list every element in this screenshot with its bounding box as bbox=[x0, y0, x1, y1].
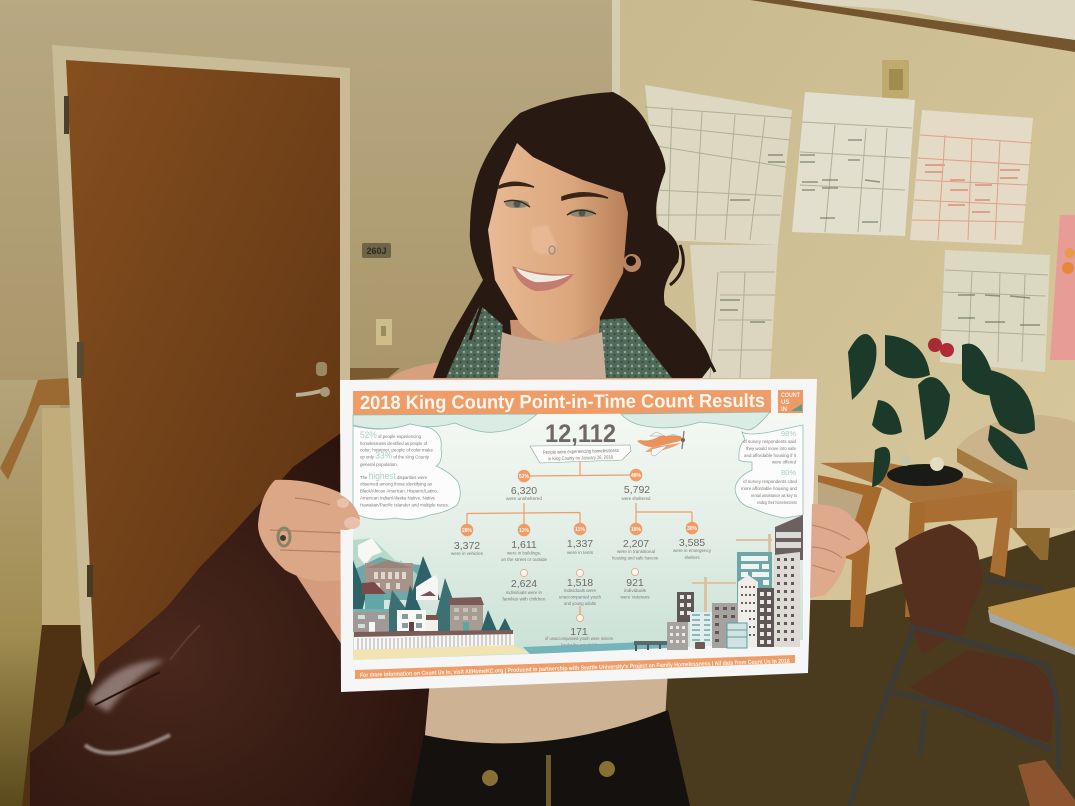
statistics numbers: 5,792 bbox=[624, 484, 650, 496]
headline total 12,112: 12,112 bbox=[545, 420, 616, 448]
percent circles: 30% bbox=[687, 526, 698, 532]
left demographics cloud: Hawaiian/Pacific Islander and multiple races. bbox=[360, 502, 449, 508]
right survey cloud: and affordable housing if it bbox=[744, 453, 797, 458]
right survey cloud: of survey respondents said bbox=[743, 439, 796, 444]
woman: hair strands bbox=[470, 245, 715, 378]
statistics captions: housing and safe havens bbox=[612, 556, 659, 560]
title band: 2018 King County Point-in-Time Count Results bbox=[360, 391, 765, 414]
right survey cloud: of survey respondents cited bbox=[743, 479, 797, 484]
picket fence bbox=[354, 634, 514, 650]
right survey cloud: rental assistance as key to bbox=[751, 493, 797, 498]
wall calendars bbox=[645, 85, 1050, 378]
statistics numbers: 921 bbox=[626, 577, 644, 589]
woman: left arm and hand bbox=[258, 480, 360, 645]
left demographics cloud bbox=[353, 424, 460, 519]
left demographics cloud: The highest disparities were bbox=[360, 471, 427, 481]
potted plant bbox=[848, 334, 1035, 487]
left demographics cloud: homelessness identified as people of bbox=[360, 441, 428, 446]
right survey cloud: they would move into safe bbox=[746, 446, 796, 451]
ribbon with headline caption bbox=[530, 445, 631, 463]
percent circles: 12% bbox=[519, 528, 530, 534]
woman: eyes and brows bbox=[499, 182, 608, 217]
wall sign 260J bbox=[362, 243, 391, 258]
statistics captions: individuals were in bbox=[506, 590, 542, 595]
woman: face bbox=[488, 143, 641, 343]
water bbox=[523, 641, 668, 654]
woman: smile bbox=[512, 266, 574, 291]
right survey cloud: 98% bbox=[781, 429, 796, 438]
poster paper bbox=[340, 379, 817, 692]
left demographics cloud: color; however, people of color make bbox=[360, 448, 433, 452]
statistics numbers: 1,337 bbox=[567, 538, 593, 550]
statistics numbers: 2,207 bbox=[623, 538, 649, 550]
statistics captions: were Veterans bbox=[620, 594, 650, 600]
left demographics cloud: general population. bbox=[360, 462, 398, 467]
right survey cloud bbox=[735, 425, 803, 518]
statistics captions: were in vehicles bbox=[451, 551, 484, 556]
woman: hair back bbox=[433, 92, 712, 378]
right survey cloud: were offered bbox=[772, 460, 796, 464]
open circles bbox=[520, 568, 638, 622]
Count Us In logo: IN bbox=[781, 407, 787, 413]
Count Us In logo: US bbox=[781, 400, 789, 406]
sticky notes bbox=[1050, 215, 1075, 360]
statistics numbers: 2,624 bbox=[511, 578, 537, 590]
icon: airplane bbox=[637, 431, 685, 456]
statistics captions: (under the age of 18) bbox=[561, 642, 597, 648]
statistics captions: individuals were bbox=[564, 588, 596, 593]
left demographics cloud: American Indian/Alaska Native, Native bbox=[360, 496, 435, 500]
Count Us In logo bbox=[778, 390, 803, 413]
statistics numbers: 171 bbox=[570, 626, 588, 638]
right survey cloud: 80% bbox=[781, 468, 796, 477]
top mint clouds bbox=[353, 412, 770, 432]
statistics captions: were unsheltered bbox=[506, 496, 542, 501]
percent circles: 18% bbox=[631, 527, 642, 533]
woman: body and sweater bbox=[388, 362, 702, 806]
city skyline illustration bbox=[634, 515, 803, 651]
neighborhood illustration bbox=[353, 538, 513, 638]
statistics captions bbox=[451, 496, 712, 648]
statistics captions: were in buildings, bbox=[507, 550, 541, 556]
second chair corner bbox=[1018, 760, 1075, 806]
statistics captions: were sheltered bbox=[622, 496, 651, 501]
woman: neck and turtleneck bbox=[498, 318, 606, 378]
left demographics cloud: 52% of people experiencing bbox=[360, 430, 421, 440]
woman: scarf bbox=[446, 305, 672, 378]
percent circles: 52% bbox=[519, 474, 530, 480]
Count Us In logo: COUNT bbox=[781, 393, 800, 399]
statistics captions: unaccompanied youth bbox=[559, 594, 601, 600]
statistics numbers: 1,518 bbox=[567, 577, 593, 589]
fingers over poster left bbox=[330, 492, 360, 530]
percent circles: 11% bbox=[575, 527, 585, 533]
percent circles: 28% bbox=[462, 528, 473, 534]
ribbon with headline caption: People were experiencing homelessness bbox=[543, 448, 619, 456]
poster background panel bbox=[353, 412, 803, 660]
statistics captions: individuals bbox=[624, 588, 647, 593]
right survey cloud: more affordable housing and bbox=[741, 486, 797, 491]
poster bbox=[340, 379, 817, 692]
statistics numbers bbox=[454, 484, 705, 638]
statistics captions: were in transitional bbox=[617, 549, 655, 554]
left demographics cloud: Black/African American, Hispanic/Latino, bbox=[360, 488, 438, 494]
footer band: For more information on Count Us In, visit AllHomeKC.org | Produced in partnership with Seattle University's Project on Family Homelessness | All data from Count Us In 2018 bbox=[360, 659, 790, 679]
left demographics cloud: observed among those identifying as bbox=[360, 482, 433, 486]
statistics numbers: 1,611 bbox=[511, 539, 537, 551]
statistics captions: were in tents bbox=[567, 550, 594, 555]
sand bbox=[353, 645, 530, 660]
percent circles: 48% bbox=[631, 473, 642, 479]
statistics captions: of unaccompanied youth were minors bbox=[545, 636, 614, 641]
light switch bbox=[376, 319, 392, 345]
small wooden chair and side table bbox=[818, 462, 1013, 627]
statistics captions: were in emergency bbox=[673, 548, 712, 553]
ribbon with headline caption: in King County on January 26, 2018. bbox=[548, 455, 614, 462]
statistics captions: shelters bbox=[684, 555, 700, 560]
tree connector lines bbox=[467, 462, 692, 615]
right survey cloud: ending their homelessness bbox=[757, 500, 798, 505]
statistics captions: and young adults bbox=[564, 601, 597, 606]
left demographics cloud: up only 33% of the King County bbox=[360, 450, 430, 460]
percent circles bbox=[461, 469, 698, 536]
statistics numbers: 3,372 bbox=[454, 540, 480, 552]
meeting table bbox=[988, 587, 1075, 655]
leather sofa bbox=[30, 430, 432, 806]
wall sign 260J: 260J bbox=[366, 246, 387, 256]
door with frame bbox=[52, 45, 350, 700]
thermostat bbox=[882, 60, 909, 98]
statistics numbers: 3,585 bbox=[679, 537, 705, 549]
statistics captions: families with children bbox=[502, 596, 546, 602]
statistics numbers: 6,320 bbox=[511, 485, 537, 497]
armchair right bbox=[957, 415, 1075, 560]
statistics captions: on the street or outside bbox=[501, 557, 547, 562]
patterned office chair bbox=[850, 524, 1059, 806]
woman: right hand bbox=[810, 504, 868, 598]
